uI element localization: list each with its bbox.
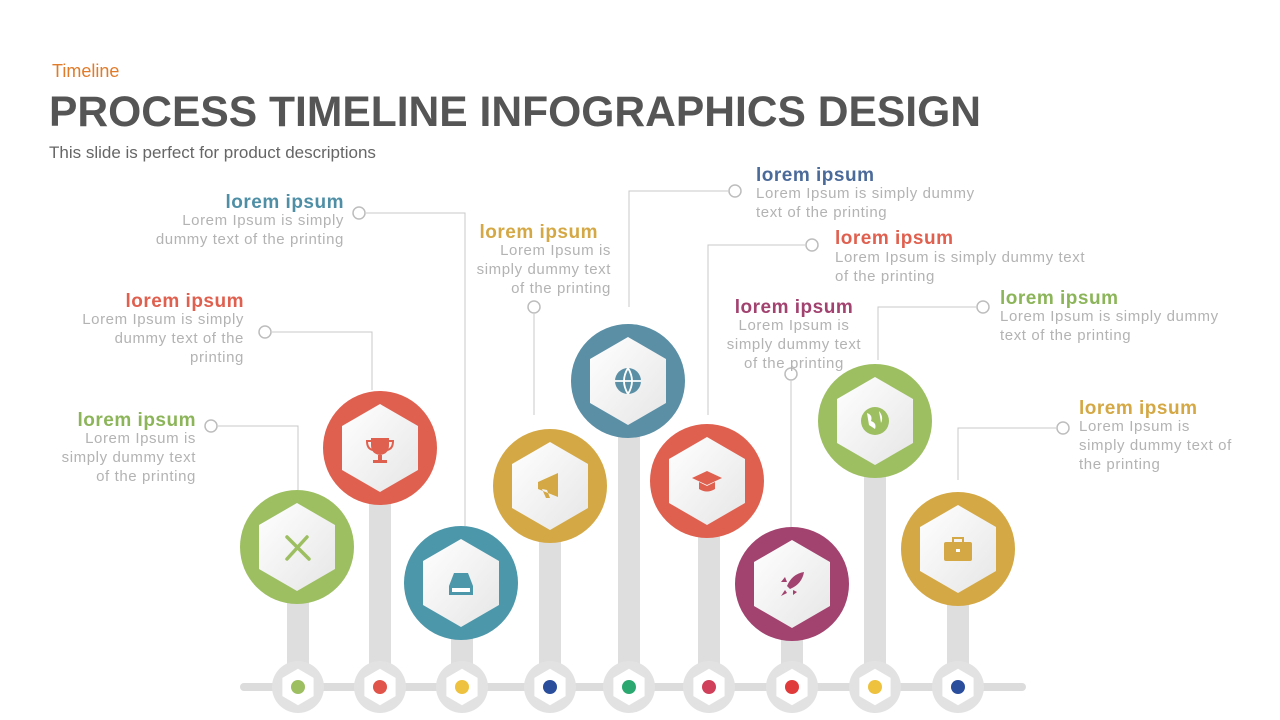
circle 8: earth: [818, 364, 932, 478]
text 3: lorem ipsum: [226, 192, 344, 213]
text 7: simply dummy text: [727, 336, 861, 353]
text 9: lorem ipsum: [1079, 398, 1197, 419]
connector lines: [205, 185, 1069, 527]
text 4: lorem ipsum: [480, 222, 598, 243]
category label: Timeline: [52, 61, 119, 81]
text 6: [835, 228, 1085, 285]
text 6: Lorem Ipsum is simply dummy text: [835, 249, 1085, 266]
text 5: [756, 165, 975, 221]
text 9: the printing: [1079, 456, 1160, 473]
text 2: lorem ipsum: [126, 291, 244, 312]
circle 1: tools: [240, 490, 354, 604]
text 7: of the printing: [744, 355, 844, 372]
text 6: lorem ipsum: [835, 228, 953, 249]
text 9: simply dummy text of: [1079, 437, 1232, 454]
text 7: lorem ipsum: [735, 297, 853, 318]
text 1: simply dummy text: [62, 449, 196, 466]
text 2: [82, 291, 244, 366]
text 9: Lorem Ipsum is: [1079, 418, 1190, 435]
subtitle: This slide is perfect for product descriptions: [49, 143, 376, 162]
text 6: of the printing: [835, 268, 935, 285]
text 1: Lorem Ipsum is: [85, 430, 196, 447]
text 2: printing: [190, 349, 244, 366]
text 3: Lorem Ipsum is simply: [182, 212, 344, 229]
text 9: [1079, 398, 1232, 473]
text 7: [727, 297, 861, 372]
text 8: text of the printing: [1000, 327, 1131, 344]
timeline base bar: [240, 683, 1026, 691]
text 4: simply dummy text: [477, 261, 611, 278]
text 8: [1000, 288, 1219, 344]
text 7: Lorem Ipsum is: [739, 317, 849, 334]
bottom nodes: [272, 661, 984, 713]
text 4: of the printing: [511, 280, 611, 297]
text 8: lorem ipsum: [1000, 288, 1118, 309]
text 1: of the printing: [96, 468, 196, 485]
header: [49, 61, 981, 162]
text 5: lorem ipsum: [756, 165, 874, 186]
text 3: [156, 192, 344, 248]
circle 7: rocket: [735, 527, 849, 641]
text 4: Lorem Ipsum is: [500, 242, 611, 259]
circle 4: megaphone: [493, 429, 607, 543]
text 5: text of the printing: [756, 204, 887, 221]
stems: [287, 381, 969, 687]
text 2: dummy text of the: [115, 330, 244, 347]
text 4: [477, 222, 611, 297]
circle 5: globe: [571, 324, 685, 438]
title: PROCESS TIMELINE INFOGRAPHICS DESIGN: [49, 88, 981, 136]
circle 2: trophy: [323, 391, 437, 505]
text 2: Lorem Ipsum is simply: [82, 311, 244, 328]
text 8: Lorem Ipsum is simply dummy: [1000, 308, 1219, 325]
circle 6: graduation cap: [650, 424, 764, 538]
text 1: [62, 410, 196, 485]
text 1: lorem ipsum: [78, 410, 196, 431]
circle 9: briefcase: [901, 492, 1015, 606]
text 3: dummy text of the printing: [156, 231, 344, 248]
text 5: Lorem Ipsum is simply dummy: [756, 185, 975, 202]
circle 3: drive: [404, 526, 518, 640]
